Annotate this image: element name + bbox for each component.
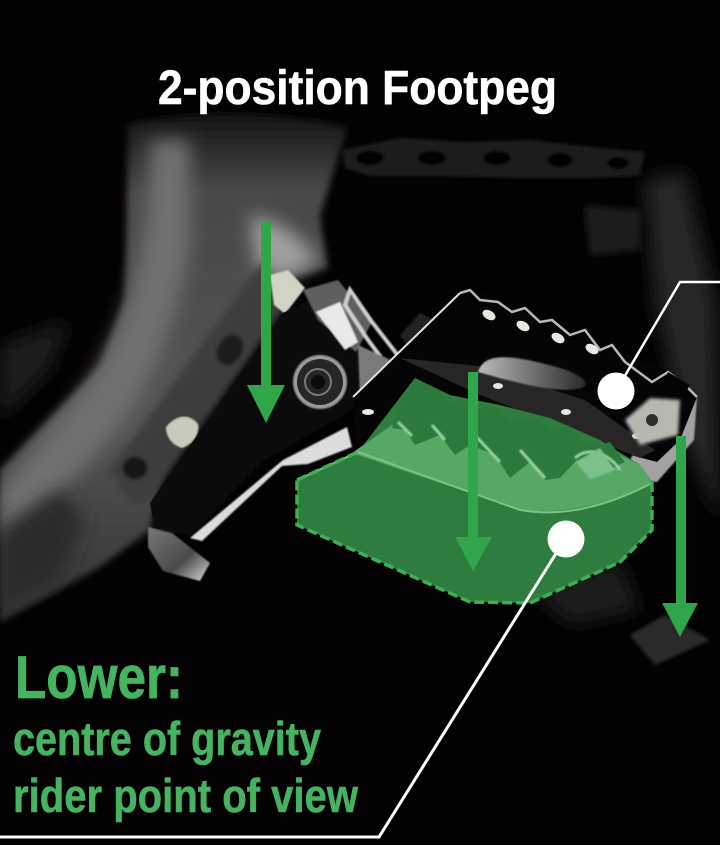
dashed outline <box>297 452 652 603</box>
mounting plate <box>110 262 283 505</box>
leader line: lower callout <box>0 539 565 837</box>
silver wedge <box>620 397 697 482</box>
toothed top edge <box>460 290 697 397</box>
marker: standard peg position <box>598 372 634 410</box>
tooth highlights <box>362 308 642 439</box>
icon: pivot bolt <box>293 355 347 409</box>
upper light face <box>352 425 652 511</box>
text: rider point of view: rider point of view <box>13 769 358 822</box>
arrow: tread down <box>455 372 492 571</box>
photo: footpeg tread <box>353 290 697 482</box>
ridge line <box>297 452 652 512</box>
photo: chain <box>342 138 645 178</box>
photo: footpeg bracket <box>148 280 455 581</box>
leader line: upper callout <box>616 282 720 391</box>
lowered footpeg ghost: green dashed shape <box>297 378 652 603</box>
silver hardware <box>303 280 455 400</box>
text: centre of gravity: centre of gravity <box>13 712 321 765</box>
tread teeth <box>392 378 625 480</box>
heading: Lower: Lower: <box>15 644 183 711</box>
title: 2-position Footpeg <box>158 62 557 115</box>
photo: frame and swingarm <box>0 114 347 622</box>
arrow: peg tip down <box>662 436 698 637</box>
marker: lowered peg position <box>548 520 584 558</box>
icon: threaded stud <box>166 417 198 448</box>
arrow: bracket down <box>247 222 285 423</box>
lower band <box>400 358 655 458</box>
photo: background engine parts right <box>530 172 720 665</box>
